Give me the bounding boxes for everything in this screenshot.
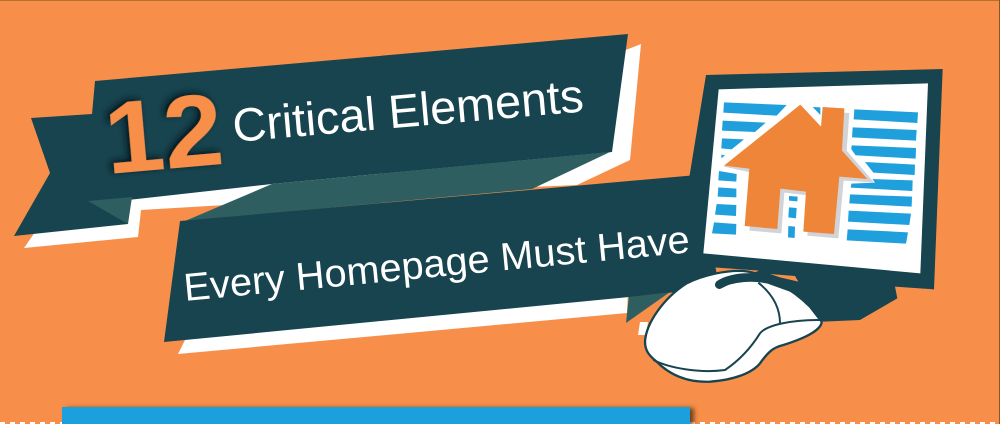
house body [724,105,867,234]
blue text lines: left [712,102,820,235]
orange gap under the bezel [770,274,798,282]
blue text lines: right [847,109,918,244]
ribbon fold: centre [185,152,610,221]
icon: computer mouse [645,271,822,382]
monitor bezel [687,69,943,289]
mouse button split [758,283,780,323]
heading: Every Homepage Must Have: Every Homepage Must Have [182,218,692,310]
house white halo [719,99,875,238]
ribbon fold: top left [88,197,132,224]
ribbon fold: bottom right [626,292,670,323]
ribbon: 12 Critical Elements [14,34,628,236]
heading: Critical Elements: Critical Elements [230,68,586,152]
white ribbon shadows [24,44,648,354]
heading number: 12: 12 [100,72,227,196]
mouse front shell line [653,320,822,371]
monitor stand [720,267,934,322]
ribbon: Every Homepage Must Have [164,175,720,342]
mouse cable [719,277,793,288]
house shadow [724,110,874,238]
door windows [788,196,798,238]
house icon [719,99,875,238]
monitor screen [703,83,928,273]
blue content bar [62,407,690,424]
icon: computer monitor [687,69,943,322]
mouse body [645,271,822,382]
